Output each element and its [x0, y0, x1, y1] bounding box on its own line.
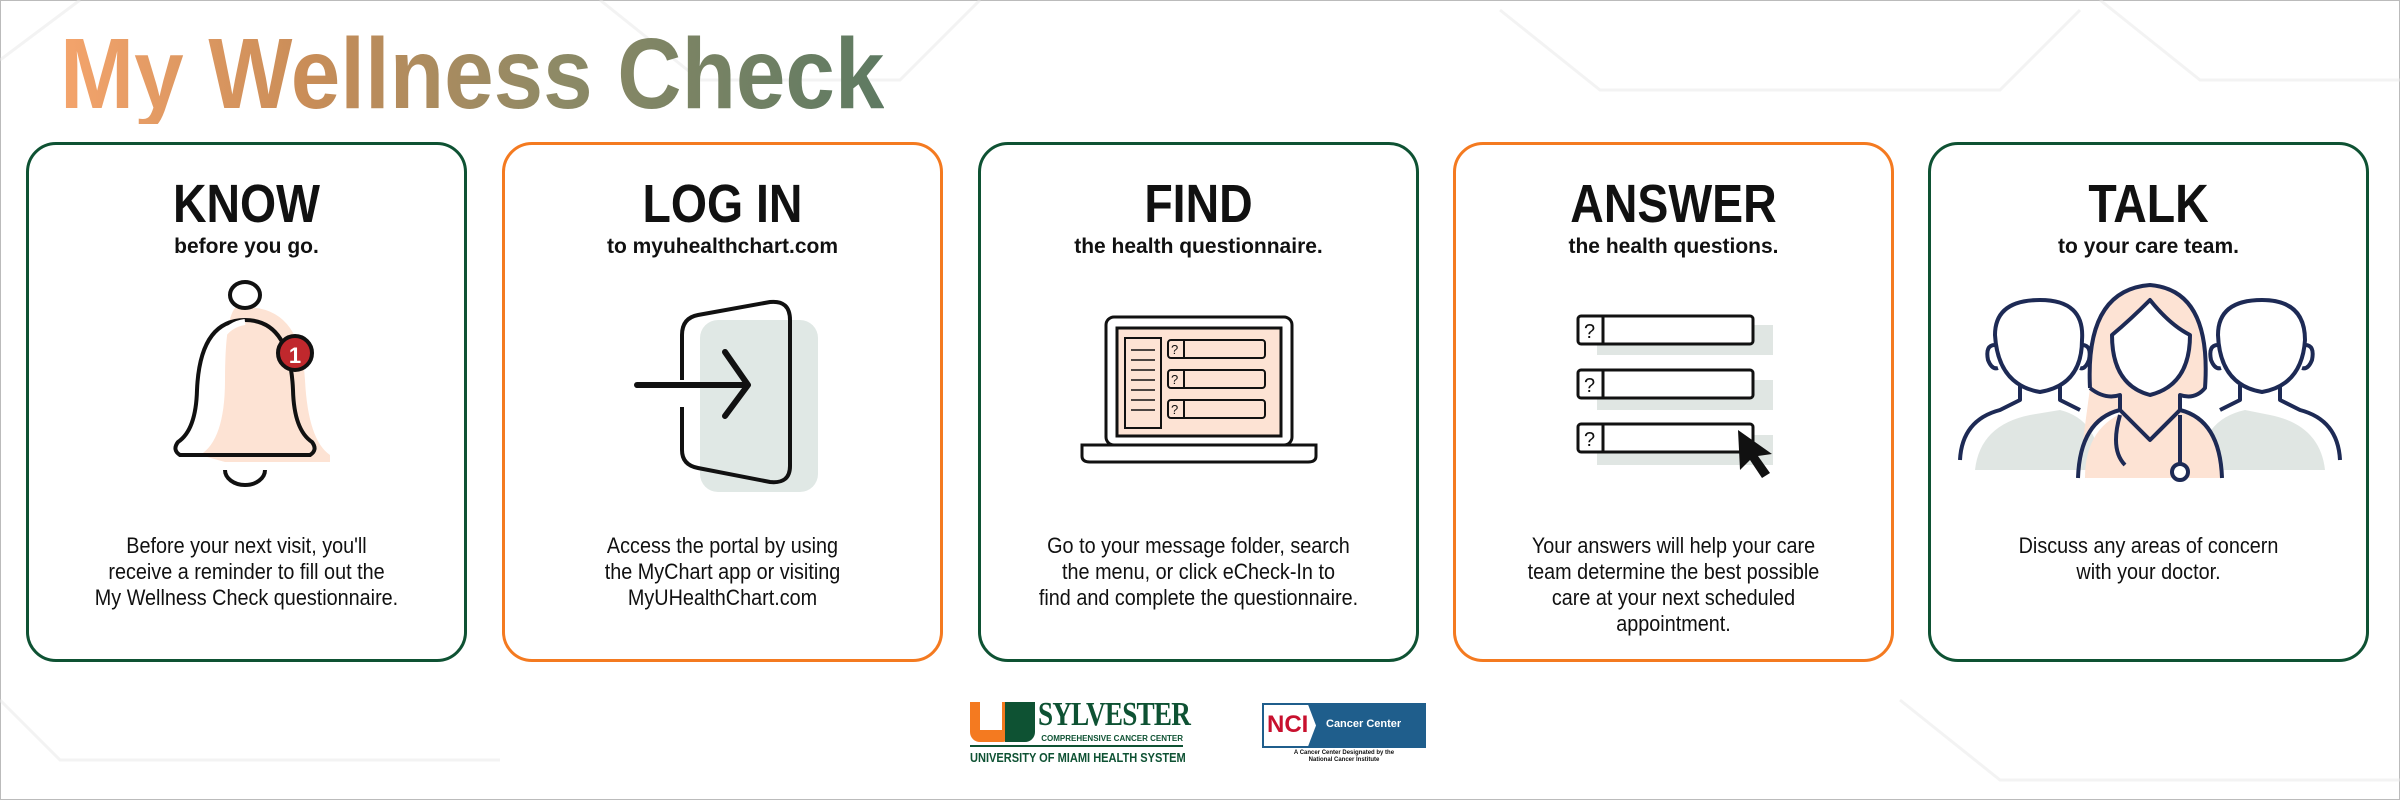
panel: talk: [1928, 142, 2369, 662]
panel: answer: [1453, 142, 1894, 662]
panel: answer: ANSWER: [1570, 174, 1777, 234]
panel: log in: LOG IN: [643, 174, 802, 234]
icon: laptop: ?: [1171, 372, 1178, 387]
panel: know: KNOW: [173, 174, 320, 234]
logo: nci: Cancer Center: [1326, 718, 1401, 730]
icon: question bars: ?: [1584, 321, 1595, 343]
logo: nci: NCI: [1267, 711, 1308, 738]
logo: sylvester: UNIVERSITY OF MIAMI HEALTH SYSTEM: [970, 750, 1186, 765]
panel: find: [978, 142, 1419, 662]
logo: sylvester: COMPREHENSIVE CANCER CENTER: [1041, 734, 1183, 743]
panel: log in: [502, 142, 943, 662]
panel: answer: the health questions.: [1568, 235, 1779, 258]
icon: question bars: ?: [1584, 375, 1595, 397]
panel: talk: Discuss any areas of concern: [2019, 533, 2278, 558]
panel: answer: Your answers will help your care: [1532, 533, 1815, 558]
panel: find: Go to your message folder, search: [1047, 533, 1350, 558]
icon: laptop: ?: [1171, 402, 1178, 417]
panel: answer: team determine the best possible: [1528, 559, 1819, 584]
panel: know: before you go.: [174, 235, 319, 258]
icon: bell: 1: [289, 343, 301, 368]
panel: talk: to your care team.: [2058, 235, 2239, 258]
panel: talk: TALK: [2088, 174, 2209, 234]
logo: sylvester: SYLVESTER: [1038, 696, 1190, 733]
logo: nci: A Cancer Center Designated by the: [1294, 750, 1394, 756]
title: My Wellness Check: [60, 18, 884, 130]
panel: find: the menu, or click eCheck-In to: [1062, 559, 1335, 584]
icon: bell: [175, 282, 330, 485]
logo: sylvester: [970, 696, 1192, 765]
logo: nci: [1262, 703, 1426, 763]
panel: log in: MyUHealthChart.com: [628, 585, 817, 610]
icon: question bars: [1578, 316, 1773, 478]
panel: find: find and complete the questionnaire.: [1039, 585, 1358, 610]
icon: laptop: ?: [1171, 342, 1178, 357]
panel: answer: appointment.: [1616, 611, 1731, 636]
panel: know: receive a reminder to fill out the: [108, 559, 385, 584]
panel: answer: care at your next scheduled: [1552, 585, 1795, 610]
panel: find: FIND: [1144, 174, 1253, 234]
panel: know: [26, 142, 467, 662]
icon: laptop: [1082, 317, 1316, 462]
panel: log in: to myuhealthchart.com: [607, 235, 838, 258]
icon: login door: [637, 302, 818, 492]
logo: nci: National Cancer Institute: [1309, 757, 1379, 763]
panel: talk: with your doctor.: [2076, 559, 2221, 584]
icon: care team: [1960, 285, 2340, 480]
panel: know: Before your next visit, you'll: [126, 533, 367, 558]
panel: log in: Access the portal by using: [607, 533, 838, 558]
panel: log in: the MyChart app or visiting: [605, 559, 840, 584]
panel: know: My Wellness Check questionnaire.: [95, 585, 398, 610]
panel: find: the health questionnaire.: [1074, 235, 1323, 258]
icon: question bars: ?: [1584, 429, 1595, 451]
